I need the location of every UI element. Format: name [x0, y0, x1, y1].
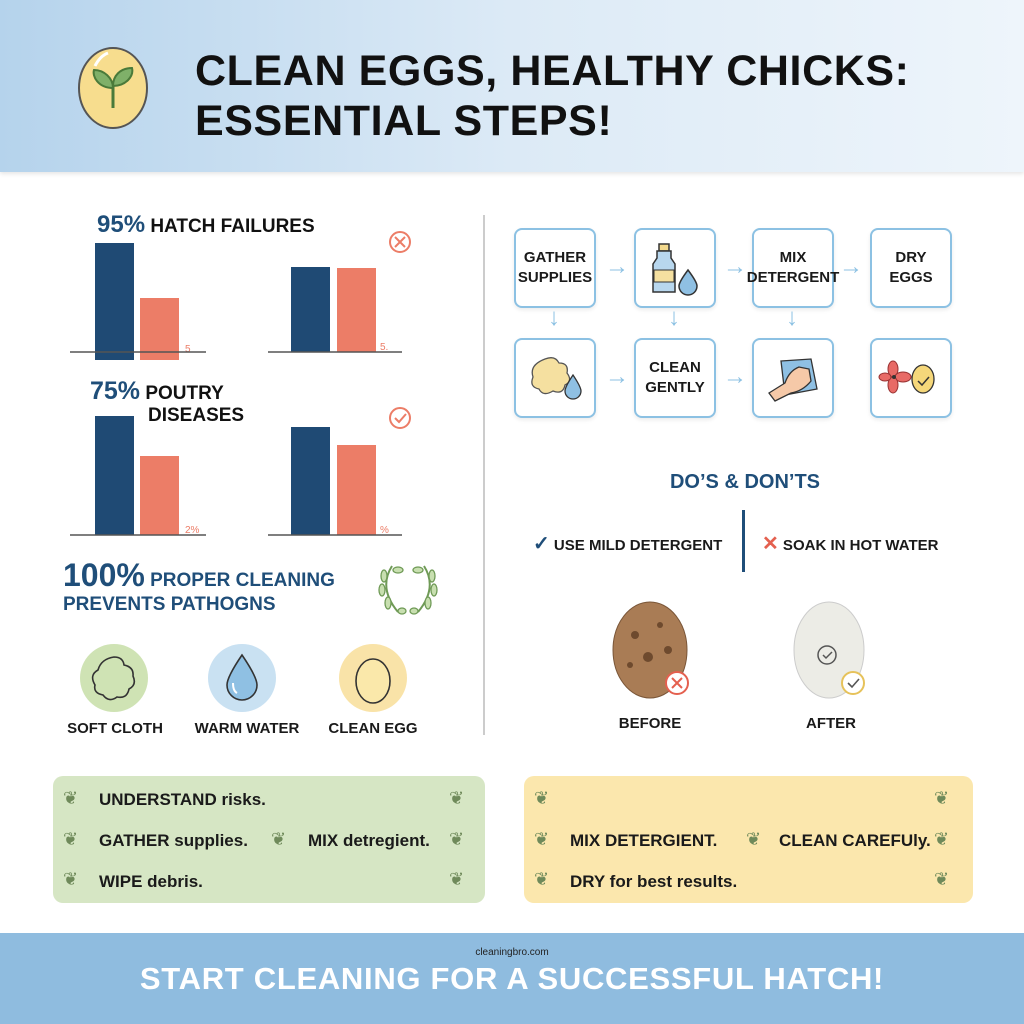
heading: 75% poultry diseases: DISEASES [148, 405, 244, 426]
flowchart [514, 228, 952, 420]
arrows: ↓ [668, 304, 680, 331]
arrows: → [723, 363, 747, 390]
panel: green checklist: ❦ [449, 788, 464, 808]
label: before: BEFORE [619, 715, 681, 732]
panel: yellow checklist: ❦ [746, 829, 761, 849]
step: dry eggs [870, 228, 952, 308]
arrows: → [723, 253, 747, 280]
item: mix detergent: MIX DETERGIENT. [570, 831, 717, 850]
title: ESSENTIAL STEPS! [195, 97, 612, 145]
panel: yellow checklist: ❦ [934, 829, 949, 849]
panel: green checklist: ❦ [63, 829, 78, 849]
item: understand risks: UNDERSTAND risks. [99, 790, 266, 809]
item: dry for best results: DRY for best results. [570, 872, 737, 891]
heading: 75% poultry diseases: 75% POUTRY [90, 377, 224, 405]
footer call to action: START CLEANING FOR A SUCCESSFUL HATCH! [140, 961, 884, 996]
panel: green checklist: ❦ [63, 869, 78, 889]
source url: cleaningbro.com [475, 947, 549, 958]
icons: supplies row [67, 644, 418, 737]
step: dry eggs: DRY [895, 249, 927, 266]
panel: yellow checklist: ❦ [534, 829, 549, 849]
label: after: AFTER [806, 715, 856, 732]
chart: hatch and disease bars: 5. [380, 342, 388, 353]
panel: green checklist: ❦ [271, 829, 286, 849]
panel: green checklist: ❦ [449, 829, 464, 849]
item: mix detergent: MIX detregient. [308, 831, 430, 850]
item: clean carefully: CLEAN CAREFUly. [779, 831, 931, 850]
panel: yellow checklist: ❦ [534, 788, 549, 808]
arrows: → [839, 253, 863, 280]
chart: hatch and disease bars: 5 [185, 344, 191, 355]
item: gather supplies: GATHER supplies. [99, 831, 248, 850]
step: clean gently: CLEAN [649, 359, 701, 376]
panel: green checklist [53, 776, 485, 903]
chart: hatch and disease bars: % [380, 525, 389, 536]
step: mix detergent [752, 228, 834, 308]
panel: yellow checklist: ❦ [934, 869, 949, 889]
chart: hatch and disease bars: 2% [185, 525, 200, 536]
panel: green checklist: ❦ [449, 869, 464, 889]
after egg [794, 602, 865, 732]
chart: hatch and disease bars [70, 231, 411, 536]
heading: do's and don'ts: DO’S & DON’TS [670, 471, 820, 493]
heading: 95% hatch failures: 95% HATCH FAILURES [97, 211, 315, 238]
step: mix detergent: MIX [780, 249, 806, 266]
panel: yellow checklist [524, 776, 973, 903]
step: dry eggs: EGGS [889, 269, 933, 286]
label: clean egg: CLEAN EGG [328, 720, 418, 737]
title: CLEAN EGGS, HEALTHY CHICKS: [195, 47, 910, 95]
icon: soft cloth [80, 644, 148, 712]
item: wipe debris: WIPE debris. [99, 872, 203, 891]
title [195, 47, 910, 145]
step: fan and egg [870, 338, 952, 418]
arrows: → [605, 363, 629, 390]
label: warm water: WARM WATER [195, 720, 299, 737]
step: gather supplies: SUPPLIES [518, 269, 592, 286]
step: clean gently [634, 338, 716, 418]
panel: stats charts [70, 211, 411, 536]
icon: clean egg [339, 644, 407, 712]
don't: soak in hot water: ✕ SOAK IN HOT WATER [762, 533, 938, 555]
label: soft cloth: SOFT CLOTH [67, 720, 163, 737]
step: gather supplies: GATHER [524, 249, 586, 266]
icon: laurel wreath [378, 566, 438, 615]
heading: 100% proper cleaning: PREVENTS PATHOGNS [63, 594, 276, 615]
panel: yellow checklist: ❦ [534, 869, 549, 889]
heading: 100% proper cleaning: 100% PROPER CLEANING [63, 557, 335, 593]
step: mix detergent: DETERGENT [747, 269, 839, 286]
before egg [612, 602, 689, 732]
arrows: → [605, 253, 629, 280]
heading: 75% poultry diseases [90, 377, 244, 426]
step: clean gently: GENTLY [645, 379, 705, 396]
heading: 100% proper cleaning [63, 557, 335, 615]
panel: green checklist: ❦ [63, 788, 78, 808]
step: sponge and drop [514, 338, 596, 418]
step: gather supplies [514, 228, 596, 308]
step: wipe hand [752, 338, 834, 418]
panel: yellow checklist: ❦ [934, 788, 949, 808]
footer band [0, 933, 1024, 1024]
icon: egg with sprout [78, 47, 148, 129]
arrows: ↓ [786, 304, 798, 331]
divider vertical [483, 215, 485, 735]
step: bottle and drop [634, 228, 716, 308]
do: use mild detergent: ✓ USE MILD DETERGENT [533, 533, 722, 555]
header band [0, 0, 1024, 172]
arrows: ↓ [548, 304, 560, 331]
arrows [548, 253, 863, 390]
icon: water drop [208, 644, 276, 712]
